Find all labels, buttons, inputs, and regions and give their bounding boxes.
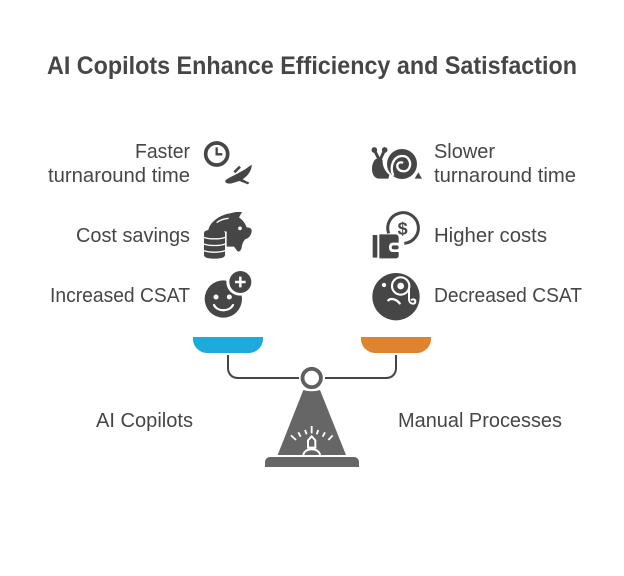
text: decreased CSAT: Decreased CSAT bbox=[434, 285, 582, 307]
text: cost savings: Cost savings bbox=[76, 225, 190, 247]
text: slower turnaround time: turnaround time bbox=[434, 165, 576, 187]
text: faster turnaround time bbox=[48, 141, 190, 187]
right pan (orange) bbox=[361, 337, 431, 353]
text: faster turnaround time: Faster bbox=[135, 141, 190, 163]
text: faster turnaround time: turnaround time bbox=[48, 165, 190, 187]
icon: clock and airplane bbox=[206, 143, 252, 184]
left pan (blue) bbox=[193, 337, 263, 353]
icon: smiling face with plus bbox=[205, 268, 254, 318]
text: slower turnaround time bbox=[434, 141, 576, 187]
icon: wallet and dollar coin: $ bbox=[398, 218, 408, 238]
scale pivot bbox=[302, 369, 321, 387]
icon: wallet and dollar coin bbox=[373, 213, 418, 258]
icon: snail bbox=[371, 147, 422, 180]
title: AI Copilots Enhance Efficiency and Satisfaction bbox=[47, 52, 577, 80]
scale beam bbox=[228, 355, 396, 378]
label: Manual Processes: Manual Processes bbox=[398, 410, 562, 432]
icon: face with monocle bbox=[372, 273, 420, 320]
scale stand with alert light bbox=[265, 390, 359, 467]
text: higher costs: Higher costs bbox=[434, 225, 547, 247]
icon: piggy bank and coins bbox=[204, 212, 252, 259]
text: slower turnaround time: Slower bbox=[434, 141, 495, 163]
text: increased CSAT: Increased CSAT bbox=[50, 285, 190, 307]
label: AI Copilots: AI Copilots bbox=[96, 410, 193, 432]
